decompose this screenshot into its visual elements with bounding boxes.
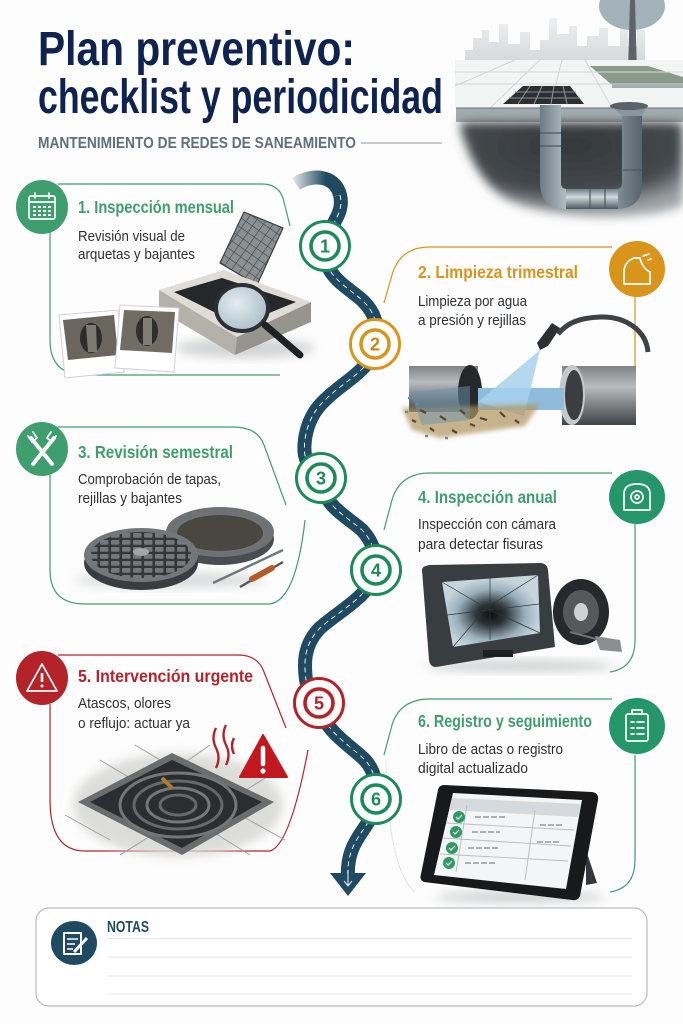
heading: 6. Registro y seguimiento [418, 711, 592, 731]
heading: 3. Revisión semestral [78, 442, 233, 462]
step marker 5 [294, 678, 344, 728]
grate [503, 86, 584, 104]
icon: pressure sprayer [609, 241, 665, 297]
illustration: street drain and U pipe [455, 0, 683, 217]
icon: warning badge [16, 651, 68, 705]
panel: 3 revisión semestral [16, 422, 305, 604]
illustration: tablet with digital log [420, 785, 605, 903]
description: a presión y rejillas [418, 312, 526, 329]
heading: 1. Inspección mensual [78, 197, 234, 217]
step marker 2 [350, 320, 400, 368]
icon: clipboard [609, 698, 665, 754]
description: Inspección con cámara [418, 516, 557, 533]
pipe [540, 105, 642, 209]
step marker 6: 6 [371, 790, 381, 810]
step marker 5: 5 [314, 694, 324, 714]
step marker 2: 2 [370, 334, 380, 354]
heading: NOTAS [107, 919, 149, 936]
icon: pipe camera [609, 470, 665, 524]
illustration: camera monitor and reel [422, 563, 622, 672]
panel: 5 intervención urgente [16, 651, 308, 857]
description: arquetas y bajantes [78, 246, 195, 263]
description: rejillas y bajantes [78, 490, 182, 507]
illustration: manhole covers and tools [75, 507, 283, 590]
panel: 1 inspección mensual [16, 180, 315, 378]
step marker 1: 1 [320, 236, 330, 256]
timeline road with arrow [296, 178, 377, 896]
heading: 2. Limpieza trimestral [418, 262, 578, 282]
description: Libro de actas o registro [418, 741, 563, 758]
step marker 1 [300, 222, 350, 270]
panel: notas [36, 908, 647, 1006]
icon: notepad and pencil [51, 921, 97, 965]
description: Comprobación de tapas, [78, 471, 221, 488]
illustration: open chamber with magnifier and photos [59, 212, 315, 378]
title [38, 23, 443, 124]
illustration: clogged drain with warning [65, 725, 287, 857]
description: Revisión visual de [78, 228, 185, 245]
title: Plan preventivo: [38, 23, 355, 76]
step marker 6 [352, 774, 400, 824]
icon: wrench and screwdriver [16, 422, 68, 476]
heading: 4. Inspección anual [418, 487, 557, 507]
step marker 4: 4 [371, 560, 381, 580]
step marker 3 [296, 454, 346, 502]
description: Atascos, olores [78, 695, 171, 712]
step marker 3: 3 [316, 468, 326, 488]
description: para detectar fisuras [418, 536, 543, 553]
illustration: pressure washing a pipe [402, 317, 648, 438]
title: checklist y periodicidad [38, 71, 443, 124]
icon: calendar [16, 180, 68, 234]
panel: 4 inspección anual [384, 470, 665, 672]
description: o reflujo: actuar ya [78, 715, 191, 732]
step marker 4 [352, 546, 400, 594]
heading: 5. Intervención urgente [78, 666, 253, 686]
icon: warning sign [240, 735, 287, 777]
panel: 2 limpieza trimestral [384, 241, 665, 438]
subtitle: MANTENIMIENTO DE REDES DE SANEAMIENTO [38, 135, 356, 152]
description: Limpieza por agua [418, 293, 528, 310]
panel: 6 registro y seguimiento [384, 698, 665, 903]
description: digital actualizado [418, 760, 528, 777]
